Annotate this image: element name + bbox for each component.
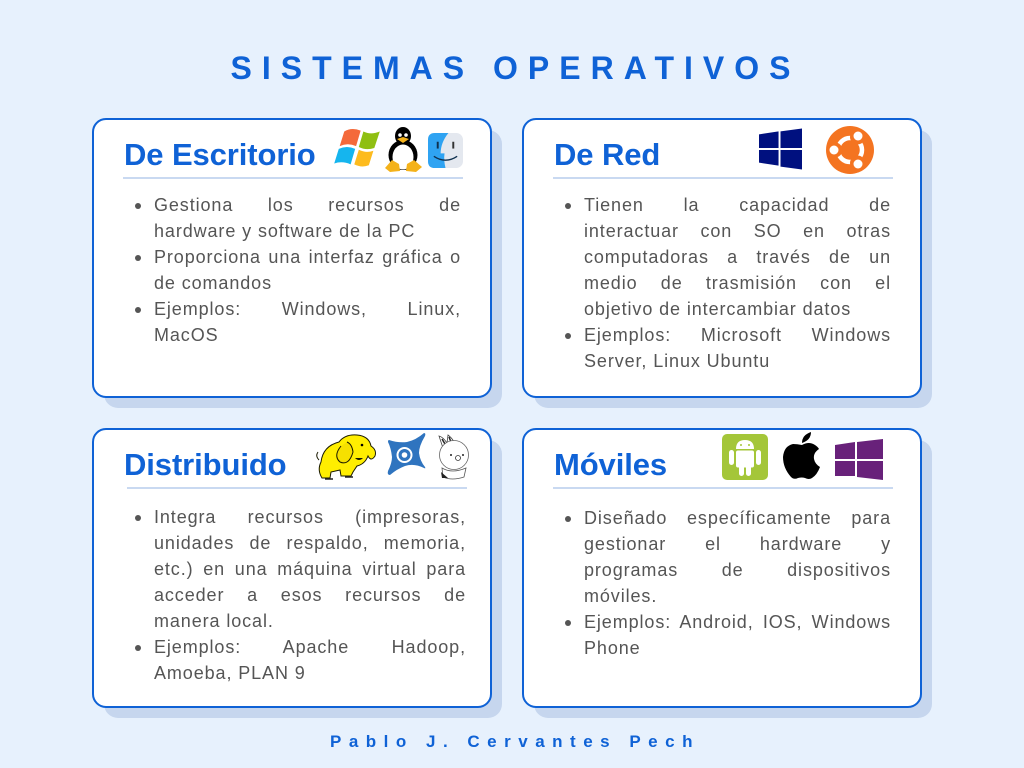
- icon: Windows flag: [334, 129, 380, 166]
- icon: Hadoop elephant: [316, 434, 376, 480]
- icon: Ubuntu logo: [826, 126, 874, 174]
- text block: Móviles bullets: móviles.: [584, 586, 657, 606]
- title: SISTEMAS OPERATIVOS: [231, 50, 800, 86]
- text block: De Red bullets: Ejemplos: Microsoft Windows: [584, 325, 891, 345]
- text block: Distribuido bullets: etc.) en una máquina virtual para: [154, 559, 466, 579]
- text block: Móviles bullets: Phone: [584, 638, 641, 658]
- text block: De Escritorio bullets: hardware y software de la PC: [154, 221, 415, 241]
- text block: De Escritorio bullets: Gestiona los recursos de: [154, 195, 461, 215]
- panel: Móviles: [522, 428, 922, 708]
- text block: De Red bullets: Server, Linux Ubuntu: [584, 351, 770, 371]
- text block: Distribuido bullets: Amoeba, PLAN 9: [154, 663, 306, 683]
- text block: Móviles bullets: [565, 508, 891, 658]
- panel shadow: De Escritorio: [104, 130, 502, 408]
- text block: Móviles bullets: Ejemplos: Android, IOS, Windows: [584, 612, 891, 632]
- icon: Amoeba star: [388, 433, 426, 475]
- icon: Plan 9 bunny: [438, 434, 469, 480]
- panel shadow: Distribuido: [104, 440, 502, 718]
- text block: De Escritorio bullets: [135, 195, 461, 345]
- icon: Linux penguin: [385, 127, 422, 172]
- heading: De Red: De Red: [554, 137, 660, 172]
- text block: Distribuido bullets: unidades de respaldo, memoria,: [154, 533, 466, 553]
- text block: De Escritorio bullets: MacOS: [154, 325, 219, 345]
- panel shadow: Móviles: [534, 440, 932, 718]
- text block: Distribuido bullets: Ejemplos: Apache Hadoop,: [154, 637, 466, 657]
- text block: De Red bullets: Tienen la capacidad de: [584, 195, 891, 215]
- text block: Móviles bullets: Diseñado específicamente para: [584, 508, 891, 528]
- text block: De Red bullets: interactuar con SO en otras: [584, 221, 891, 241]
- text block: Móviles bullets: programas de dispositivos: [584, 560, 891, 580]
- text block: De Escritorio bullets: Proporciona una interfaz gráfica o: [154, 247, 461, 267]
- icon: Windows Server logo: [759, 128, 802, 170]
- panel: Distribuido: [92, 428, 492, 708]
- text block: De Escritorio bullets: de comandos: [154, 273, 272, 293]
- text block: Distribuido bullets: Integra recursos (impresoras,: [154, 507, 466, 527]
- heading: Móviles: Móviles: [554, 447, 667, 482]
- text block: De Red bullets: objetivo de intercambiar datos: [584, 299, 851, 319]
- text block: Distribuido bullets: acceder a esos recursos de: [154, 585, 466, 605]
- text block: Distribuido bullets: [135, 507, 466, 683]
- footer: author: Pablo J. Cervantes Pech: [330, 732, 700, 751]
- text block: Distribuido bullets: manera local.: [154, 611, 274, 631]
- heading: Distribuido: Distribuido: [124, 447, 286, 482]
- icon: Android logo: [722, 434, 768, 480]
- icon: Finder face: [428, 133, 463, 168]
- icon: Apple logo: [783, 432, 820, 479]
- icon: Windows Phone logo: [835, 439, 883, 480]
- text block: De Red bullets: computadoras a través de un: [584, 247, 891, 267]
- panel: De Red: [522, 118, 922, 398]
- text block: De Red bullets: [565, 195, 891, 371]
- panel shadow: De Red: [534, 130, 932, 408]
- heading: De Escritorio: De Escritorio: [124, 137, 316, 172]
- text block: De Red bullets: medio de trasmisión con el: [584, 273, 891, 293]
- text block: Móviles bullets: gestionar el hardware y: [584, 534, 891, 554]
- text block: De Escritorio bullets: Ejemplos: Windows, Linux,: [154, 299, 461, 319]
- panel: De Escritorio: [92, 118, 492, 398]
